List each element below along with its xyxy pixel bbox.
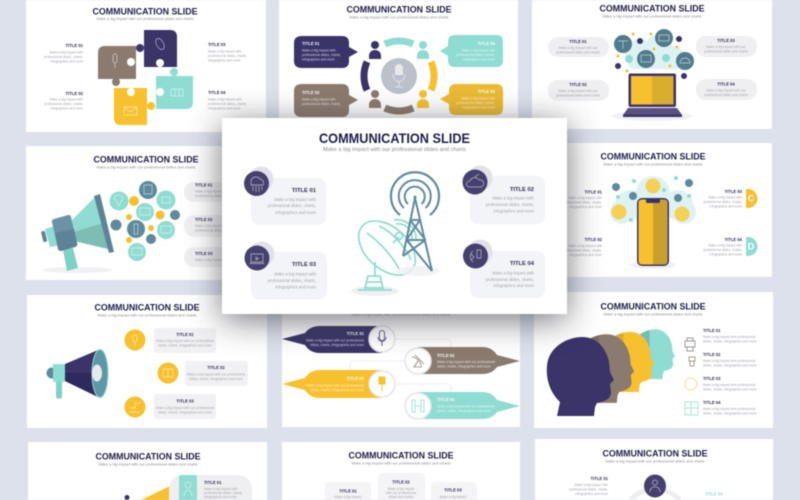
- icon: title 01: [244, 166, 274, 196]
- bubble: title 03: TITLE 03: [478, 89, 496, 94]
- left labels: TITLE 02: [585, 237, 603, 242]
- pill: title 03: Make a big impact with our: [706, 45, 747, 49]
- text: title 01: Make a big impact with: [49, 50, 83, 54]
- slide: megaphone list: [27, 295, 267, 428]
- card: title 04: infographics and more: [493, 283, 535, 288]
- item C: C: [748, 194, 755, 204]
- slide: speech bubbles ring: [279, 0, 518, 120]
- card: title 01: professional slides, charts,: [268, 203, 316, 208]
- bubble: title 02: professional slides, charts,: [302, 102, 341, 106]
- card 02: with our professional: [386, 491, 416, 495]
- row labels: [195, 182, 239, 262]
- title: COMMUNICATION SLIDE: [600, 3, 705, 14]
- subtitle: Make a big impact with our professional slides and charts: [96, 165, 196, 169]
- text: title 02: Make a big impact with: [49, 98, 83, 102]
- banner: title 02: Make a big impact with our professional: [437, 360, 495, 364]
- pill: title 04: professional slides and charts: [704, 93, 748, 97]
- left labels: professional slides, charts,: [563, 200, 602, 204]
- title: COMMUNICATION SLIDE: [94, 154, 199, 165]
- puzzle pieces: [98, 30, 193, 125]
- card: title 02: [470, 176, 545, 224]
- bubble: title 02: [294, 84, 358, 117]
- card 03: [431, 482, 477, 500]
- pill: title 03: professional slides and charts: [704, 50, 748, 54]
- card: title 04: TITLE 04: [510, 261, 535, 267]
- card 02: TITLE 02: [392, 480, 410, 484]
- text: title 01: [569, 476, 609, 496]
- title: COMMUNICATION SLIDE: [319, 131, 470, 146]
- card: title 04: [470, 251, 545, 298]
- item 01: slides, charts, infographics and more: [158, 344, 212, 348]
- item 03: [124, 394, 216, 419]
- item 02: Make a big impact with our professional: [187, 372, 245, 376]
- row labels: professional slides and charts: [195, 228, 239, 232]
- icons: [685, 338, 698, 415]
- list text: slides, charts, infographics and more: [703, 412, 757, 416]
- subtitle: Make a big impact with our professional slides and charts: [604, 312, 703, 316]
- pill: title 04: [696, 79, 757, 100]
- item 02: [158, 361, 248, 386]
- card: title 04: Make a big impact with: [492, 270, 535, 276]
- title: COMMUNICATION SLIDE: [602, 448, 708, 459]
- megaphone: [46, 350, 108, 398]
- text: title 01: infographics and more: [50, 60, 83, 64]
- card: title 01: TITLE 01: [292, 188, 317, 194]
- bubbles: [110, 181, 180, 261]
- text: title 03: infographics and more: [208, 58, 241, 62]
- card: title 03: [251, 252, 327, 299]
- left labels: TITLE 01: [585, 190, 603, 194]
- left labels: Make a big impact with: [568, 244, 602, 248]
- card 03: Make a big impact: [440, 495, 466, 499]
- title: COMMUNICATION SLIDE: [96, 451, 201, 462]
- text: title 01: professional slides, charts,: [44, 55, 83, 59]
- banner: title 04: slides, charts, infographics and more: [437, 409, 491, 413]
- people icons: [369, 41, 429, 108]
- bubble: title 02: TITLE 02: [302, 90, 320, 95]
- card 01: TITLE 01: [339, 488, 357, 494]
- slide: bottom middle: [282, 442, 520, 500]
- bubble: title 04: infographics and more: [462, 58, 495, 62]
- pill: title 01: professional slides and charts: [556, 50, 600, 54]
- item 03: TITLE 03: [176, 398, 194, 404]
- row labels: Make a big impact with our: [195, 224, 235, 228]
- head silhouettes: [547, 329, 675, 416]
- icon: title 02: [462, 166, 492, 194]
- banner: title 01: [282, 326, 395, 353]
- text: title 01: [44, 43, 84, 64]
- card: title 01: [251, 178, 326, 225]
- slide: bottom left: [28, 442, 267, 500]
- item 03: slides, charts, infographics and more: [158, 410, 212, 414]
- subtitle: Make a big impact with our professional slides and charts: [323, 147, 467, 153]
- list text: TITLE 04: [703, 400, 721, 405]
- bubble: title 03: Make a big impact with: [461, 96, 495, 100]
- center card shadow: [222, 124, 567, 320]
- item C: professional slides, charts,: [703, 200, 742, 204]
- left labels: infographics and more: [569, 253, 602, 257]
- pill: title 02: professional slides and charts: [556, 94, 600, 98]
- card 02: slides and charts: [389, 495, 414, 499]
- subtitle: Make a big impact with our professional slides and charts: [98, 313, 197, 317]
- row labels: TITLE 02: [195, 217, 213, 222]
- subtitle: Make a big impact with our professional slides and charts: [602, 14, 702, 18]
- card 02: Make a big impact: [388, 487, 414, 491]
- banner: title 02: [405, 347, 520, 374]
- slide: bottom right: [535, 439, 773, 500]
- bubble: title 03: professional slides, charts,: [456, 101, 495, 105]
- title: COMMUNICATION SLIDE: [94, 302, 200, 313]
- text: title 04: infographics and more: [208, 106, 241, 110]
- row labels: TITLE 01: [195, 182, 213, 188]
- text: title 02: TITLE 02: [66, 91, 84, 96]
- item D: [703, 237, 758, 256]
- banner: title 03: slides, charts, infographics and more: [310, 388, 364, 392]
- card 01: [325, 482, 371, 500]
- bubble: title 02: Make a big impact with: [302, 98, 336, 102]
- left labels: professional slides, charts,: [563, 248, 602, 252]
- slide: heads: [534, 292, 773, 428]
- item D: TITLE 04: [725, 237, 743, 242]
- cloud with coins: [610, 176, 696, 224]
- illustration: satellite dish: [348, 210, 426, 296]
- list text: Make a big impact with professional: [703, 383, 755, 387]
- banner: title 03: TITLE 03: [347, 376, 365, 381]
- subtitle: Make a big impact with our professional slides and charts: [98, 462, 198, 466]
- text: title 02: infographics and more: [50, 106, 83, 110]
- pill with yellow wedge: professional slides, charts,: [204, 491, 243, 495]
- pill: title 01: TITLE 01: [569, 39, 587, 44]
- text: title 01: Make a big impact with: [574, 483, 608, 487]
- card: title 04: professional slides, charts,: [486, 277, 534, 282]
- bubble: title 01: infographics and more: [302, 58, 335, 62]
- text: title 02: [44, 91, 84, 110]
- pill with yellow wedge: infographics and more: [204, 495, 237, 499]
- item 01: TITLE 01: [176, 332, 194, 337]
- item 02: slides, charts, infographics and more: [189, 377, 243, 381]
- row labels: professional slides and charts: [195, 194, 239, 198]
- list text: slides, charts, infographics and more: [703, 388, 757, 392]
- card: title 01: infographics and more: [275, 210, 317, 215]
- phone: [630, 198, 676, 269]
- pill: title 03: [696, 36, 757, 57]
- subtitle: Make a big impact with our professional slides and charts: [606, 459, 705, 463]
- bubble: title 03: infographics and more: [462, 106, 495, 110]
- banner: title 04: [405, 392, 520, 419]
- text: title 04: professional slides, charts,: [208, 102, 247, 106]
- title: COMMUNICATION SLIDE: [600, 301, 706, 312]
- ring with navy node: [630, 474, 680, 500]
- title: COMMUNICATION SLIDE: [348, 450, 454, 461]
- text: title 02: professional slides, charts,: [44, 102, 83, 106]
- text: title 01: TITLE 01: [66, 43, 84, 48]
- item C: [703, 189, 758, 208]
- title: COMMUNICATION SLIDE: [600, 151, 706, 162]
- banner: title 03: Make a big impact with our professional: [306, 384, 364, 388]
- card 02: [378, 473, 425, 500]
- cloud of icons: [614, 29, 694, 79]
- subtitle: Make a big impact with our professional slides and charts: [96, 17, 194, 21]
- bubble: title 01: [294, 36, 358, 68]
- pill with yellow wedge: [124, 475, 252, 500]
- slide: megaphone circles: [26, 146, 274, 280]
- bubble: title 01: TITLE 01: [302, 41, 320, 46]
- item 01: [124, 328, 216, 353]
- item D: infographics and more: [709, 252, 742, 256]
- item D: professional slides, charts,: [703, 248, 742, 252]
- slide: puzzle: [26, 0, 266, 132]
- bubble: title 04: [440, 35, 503, 67]
- list text: Make a big impact with professional: [703, 407, 755, 411]
- text: title 04: Make a big impact with: [208, 98, 242, 102]
- item D: Make a big impact with: [708, 244, 742, 248]
- pill: title 02: [548, 80, 609, 101]
- bubble: title 04: TITLE 04: [478, 41, 496, 46]
- banner: title 02: TITLE 02: [437, 353, 455, 358]
- subtitle: Make a big impact with our professional slides and charts: [350, 16, 449, 20]
- title: COMMUNICATION SLIDE: [346, 4, 452, 15]
- text: title 03: Make a big impact with: [208, 50, 242, 54]
- card: title 02: professional slides, charts,: [486, 202, 534, 207]
- bubble: title 01: professional slides, charts,: [302, 53, 341, 57]
- pill: title 01: Make a big impact with our: [558, 46, 599, 50]
- row labels: Make a big impact with our: [195, 190, 235, 194]
- subtitle: Make a big impact with our professional slides and charts: [604, 162, 703, 166]
- text: title 01: infographics and more: [575, 492, 608, 496]
- text: title 01: TITLE 01: [591, 476, 609, 481]
- illustration: radio tower: [391, 172, 440, 276]
- banner: title 04: TITLE 04: [437, 397, 455, 402]
- banner: title 02: slides, charts, infographics and more: [437, 364, 491, 368]
- left labels: Make a big impact with: [568, 196, 602, 200]
- row labels: TITLE 03: [195, 251, 213, 256]
- center microphone: [381, 58, 417, 94]
- pill: title 03: TITLE 03: [717, 38, 735, 43]
- card: title 02: TITLE 02: [510, 187, 534, 193]
- card 01: Make a big impact: [335, 495, 361, 499]
- item 03: Make a big impact with our professional: [156, 406, 214, 410]
- pill with yellow wedge: Make a big impact with: [204, 487, 238, 491]
- pill: title 02: Make a big impact with our: [558, 89, 599, 93]
- item D: D: [748, 242, 755, 252]
- item 02: TITLE 02: [207, 365, 225, 370]
- list text: Make a big impact with professional: [703, 335, 755, 339]
- slide: smartphone: [532, 143, 772, 277]
- banner: title 03: [282, 370, 395, 398]
- pill: title 04: TITLE 04: [717, 82, 735, 86]
- slide: arrow banners: [282, 295, 520, 427]
- text: title 03: TITLE 03: [208, 42, 226, 47]
- list text: TITLE 03: [703, 376, 721, 381]
- slide: laptop: [532, 0, 772, 129]
- text: title 04: [208, 90, 247, 110]
- laptop: [612, 74, 692, 121]
- connectors: [350, 339, 451, 392]
- bubble: title 04: professional slides, charts,: [456, 53, 495, 57]
- text: title 04: TITLE 04: [208, 90, 226, 95]
- text: title 04: TITLE 04: [705, 492, 723, 496]
- banner: title 04: Make a big impact with our professional: [437, 404, 495, 408]
- left labels: [563, 190, 603, 257]
- pill with yellow wedge: TITLE 01: [204, 480, 222, 485]
- pill rows: [184, 182, 274, 267]
- left labels: infographics and more: [569, 205, 602, 209]
- banner: title 01: TITLE 01: [347, 331, 365, 336]
- center card: [222, 118, 567, 314]
- card: title 03: infographics and more: [275, 284, 317, 290]
- bubble: title 04: Make a big impact with: [461, 48, 495, 52]
- list text: slides, charts, infographics and more: [703, 364, 757, 368]
- card: title 01: Make a big impact with: [274, 197, 317, 202]
- pill: title 04: Make a big impact with our: [706, 88, 747, 92]
- banner: title 01: Make a big impact with our professional: [306, 338, 364, 342]
- title: COMMUNICATION SLIDE: [92, 6, 198, 17]
- item C: infographics and more: [709, 204, 742, 208]
- megaphone: [41, 194, 114, 273]
- card: title 03: professional slides, charts,: [268, 278, 316, 283]
- pill: title 01: [548, 37, 609, 57]
- text: title 03: [208, 42, 247, 62]
- banner: title 01: slides, charts, infographics and more: [310, 343, 364, 347]
- ring segments: [364, 41, 434, 111]
- list text: Make a big impact with professional: [703, 359, 755, 363]
- card: title 03: Make a big impact with: [274, 272, 317, 276]
- bubble: title 01: Make a big impact with: [302, 48, 336, 52]
- item C: TITLE 03: [725, 189, 743, 194]
- text: title 01: professional slides, charts,: [569, 488, 608, 492]
- card: title 02: Make a big impact with: [492, 196, 535, 200]
- subtitle: Make a big impact with our professional slides and charts: [352, 312, 451, 316]
- bubble: title 03: [440, 84, 503, 115]
- pill: title 02: TITLE 02: [569, 82, 587, 87]
- list text: TITLE 01: [703, 328, 721, 333]
- card: title 02: infographics and more: [493, 208, 535, 214]
- row labels: Make a big impact with our: [195, 258, 235, 262]
- list text: [703, 328, 757, 416]
- icon: title 04: [463, 240, 492, 268]
- list text: TITLE 02: [703, 352, 721, 357]
- list text: slides, charts, infographics and more: [703, 340, 757, 344]
- icon: title 03: [244, 242, 274, 270]
- item C: Make a big impact with: [708, 196, 742, 200]
- card 03: TITLE 03: [444, 488, 462, 492]
- text: title 03: professional slides, charts,: [208, 54, 247, 58]
- item 01: Make a big impact with our professional: [156, 339, 214, 343]
- card: title 03: TITLE 03: [292, 262, 317, 268]
- subtitle: Make a big impact with our professional slides and charts: [352, 461, 451, 465]
